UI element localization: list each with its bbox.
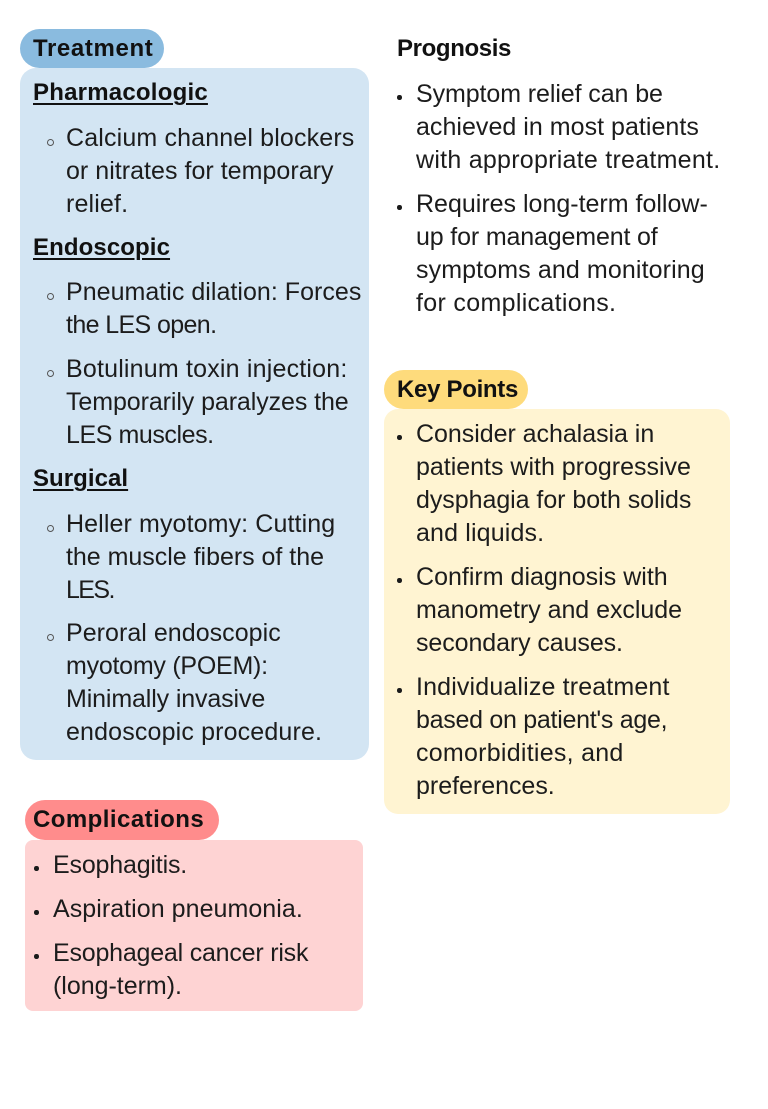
key point two: manometry and exclude xyxy=(416,596,682,624)
POEM text: Peroral endoscopic xyxy=(66,619,281,647)
prognosis point one: Symptom relief can be xyxy=(416,80,663,108)
key point one: dysphagia for both solids xyxy=(416,486,691,514)
heller text: Heller myotomy: Cutting xyxy=(66,510,335,538)
bullet marker xyxy=(397,578,402,582)
pneumatic dilation text: the LES open. xyxy=(66,311,216,339)
bullet marker xyxy=(47,634,54,641)
pharmacologic text: or nitrates for temporary xyxy=(66,157,334,185)
prognosis point two: for complications. xyxy=(416,289,616,317)
heller text: the muscle fibers of the xyxy=(66,543,324,571)
complications background xyxy=(25,840,363,1011)
panel: prognosis xyxy=(397,35,720,317)
complication list: Esophageal cancer risk xyxy=(53,939,308,967)
treatment background xyxy=(20,68,369,760)
key point one: Consider achalasia in xyxy=(416,420,654,448)
complications heading: Complications xyxy=(33,806,204,833)
pneumatic dilation text: Pneumatic dilation: Forces xyxy=(66,278,361,306)
heller text: LES. xyxy=(66,576,114,604)
prognosis point two: symptoms and monitoring xyxy=(416,256,705,284)
prognosis point two: up for management of xyxy=(416,223,658,251)
key point three: Individualize treatment xyxy=(416,673,670,701)
key points heading: Key Points xyxy=(397,376,518,403)
subheading: surgical: Surgical xyxy=(33,465,128,492)
botulinum text: LES muscles. xyxy=(66,421,214,449)
key point three: comorbidities, and xyxy=(416,739,624,767)
key point two: Confirm diagnosis with xyxy=(416,563,668,591)
complication list: Aspiration pneumonia. xyxy=(53,895,303,923)
prognosis point two: Requires long-term follow- xyxy=(416,190,708,218)
key points heading pill xyxy=(384,370,528,409)
panel: key points xyxy=(384,370,730,814)
key point two: secondary causes. xyxy=(416,629,623,657)
POEM text: myotomy (POEM): xyxy=(66,652,268,680)
bullet marker xyxy=(47,293,54,300)
heller text xyxy=(66,510,335,604)
bullet marker xyxy=(397,435,402,440)
bullet marker xyxy=(397,95,402,100)
complications heading pill xyxy=(25,800,219,840)
key point three xyxy=(416,673,670,800)
bullet marker xyxy=(397,688,402,692)
pharmacologic text: Calcium channel blockers xyxy=(66,124,354,152)
POEM text: Minimally invasive xyxy=(66,685,265,713)
key points background xyxy=(384,409,730,814)
prognosis point two xyxy=(416,190,708,317)
complication list xyxy=(34,851,308,1000)
pneumatic dilation text xyxy=(66,278,361,339)
treatment heading pill xyxy=(20,29,164,68)
bullet marker xyxy=(47,139,54,146)
bullet marker xyxy=(47,370,54,377)
bullet marker xyxy=(397,205,402,210)
prognosis point one: with appropriate treatment. xyxy=(416,146,720,174)
pharmacologic text: relief. xyxy=(66,190,128,218)
complication list: (long-term). xyxy=(53,972,182,1000)
botulinum text: Botulinum toxin injection: xyxy=(66,355,347,383)
panel: complications xyxy=(25,800,363,1011)
key point one: and liquids. xyxy=(416,519,544,547)
key point one xyxy=(416,420,691,547)
botulinum text xyxy=(66,355,349,449)
panel: treatment xyxy=(20,29,369,760)
treatment heading: Treatment xyxy=(33,35,153,62)
prognosis point one: achieved in most patients xyxy=(416,113,699,141)
pharmacologic text xyxy=(66,124,354,218)
key point three: preferences. xyxy=(416,772,555,800)
prognosis heading: Prognosis xyxy=(397,35,511,62)
bullet marker xyxy=(47,525,54,532)
subheading: endoscopic: Endoscopic xyxy=(33,234,170,261)
subheading: pharmacologic: Pharmacologic xyxy=(33,79,208,106)
prognosis point one xyxy=(416,80,720,174)
key point one: patients with progressive xyxy=(416,453,691,481)
key point three: based on patient's age, xyxy=(416,706,667,734)
key point two xyxy=(416,563,682,657)
POEM text: endoscopic procedure. xyxy=(66,718,322,746)
complication list: Esophagitis. xyxy=(53,851,187,879)
botulinum text: Temporarily paralyzes the xyxy=(66,388,349,416)
POEM text xyxy=(66,619,322,746)
